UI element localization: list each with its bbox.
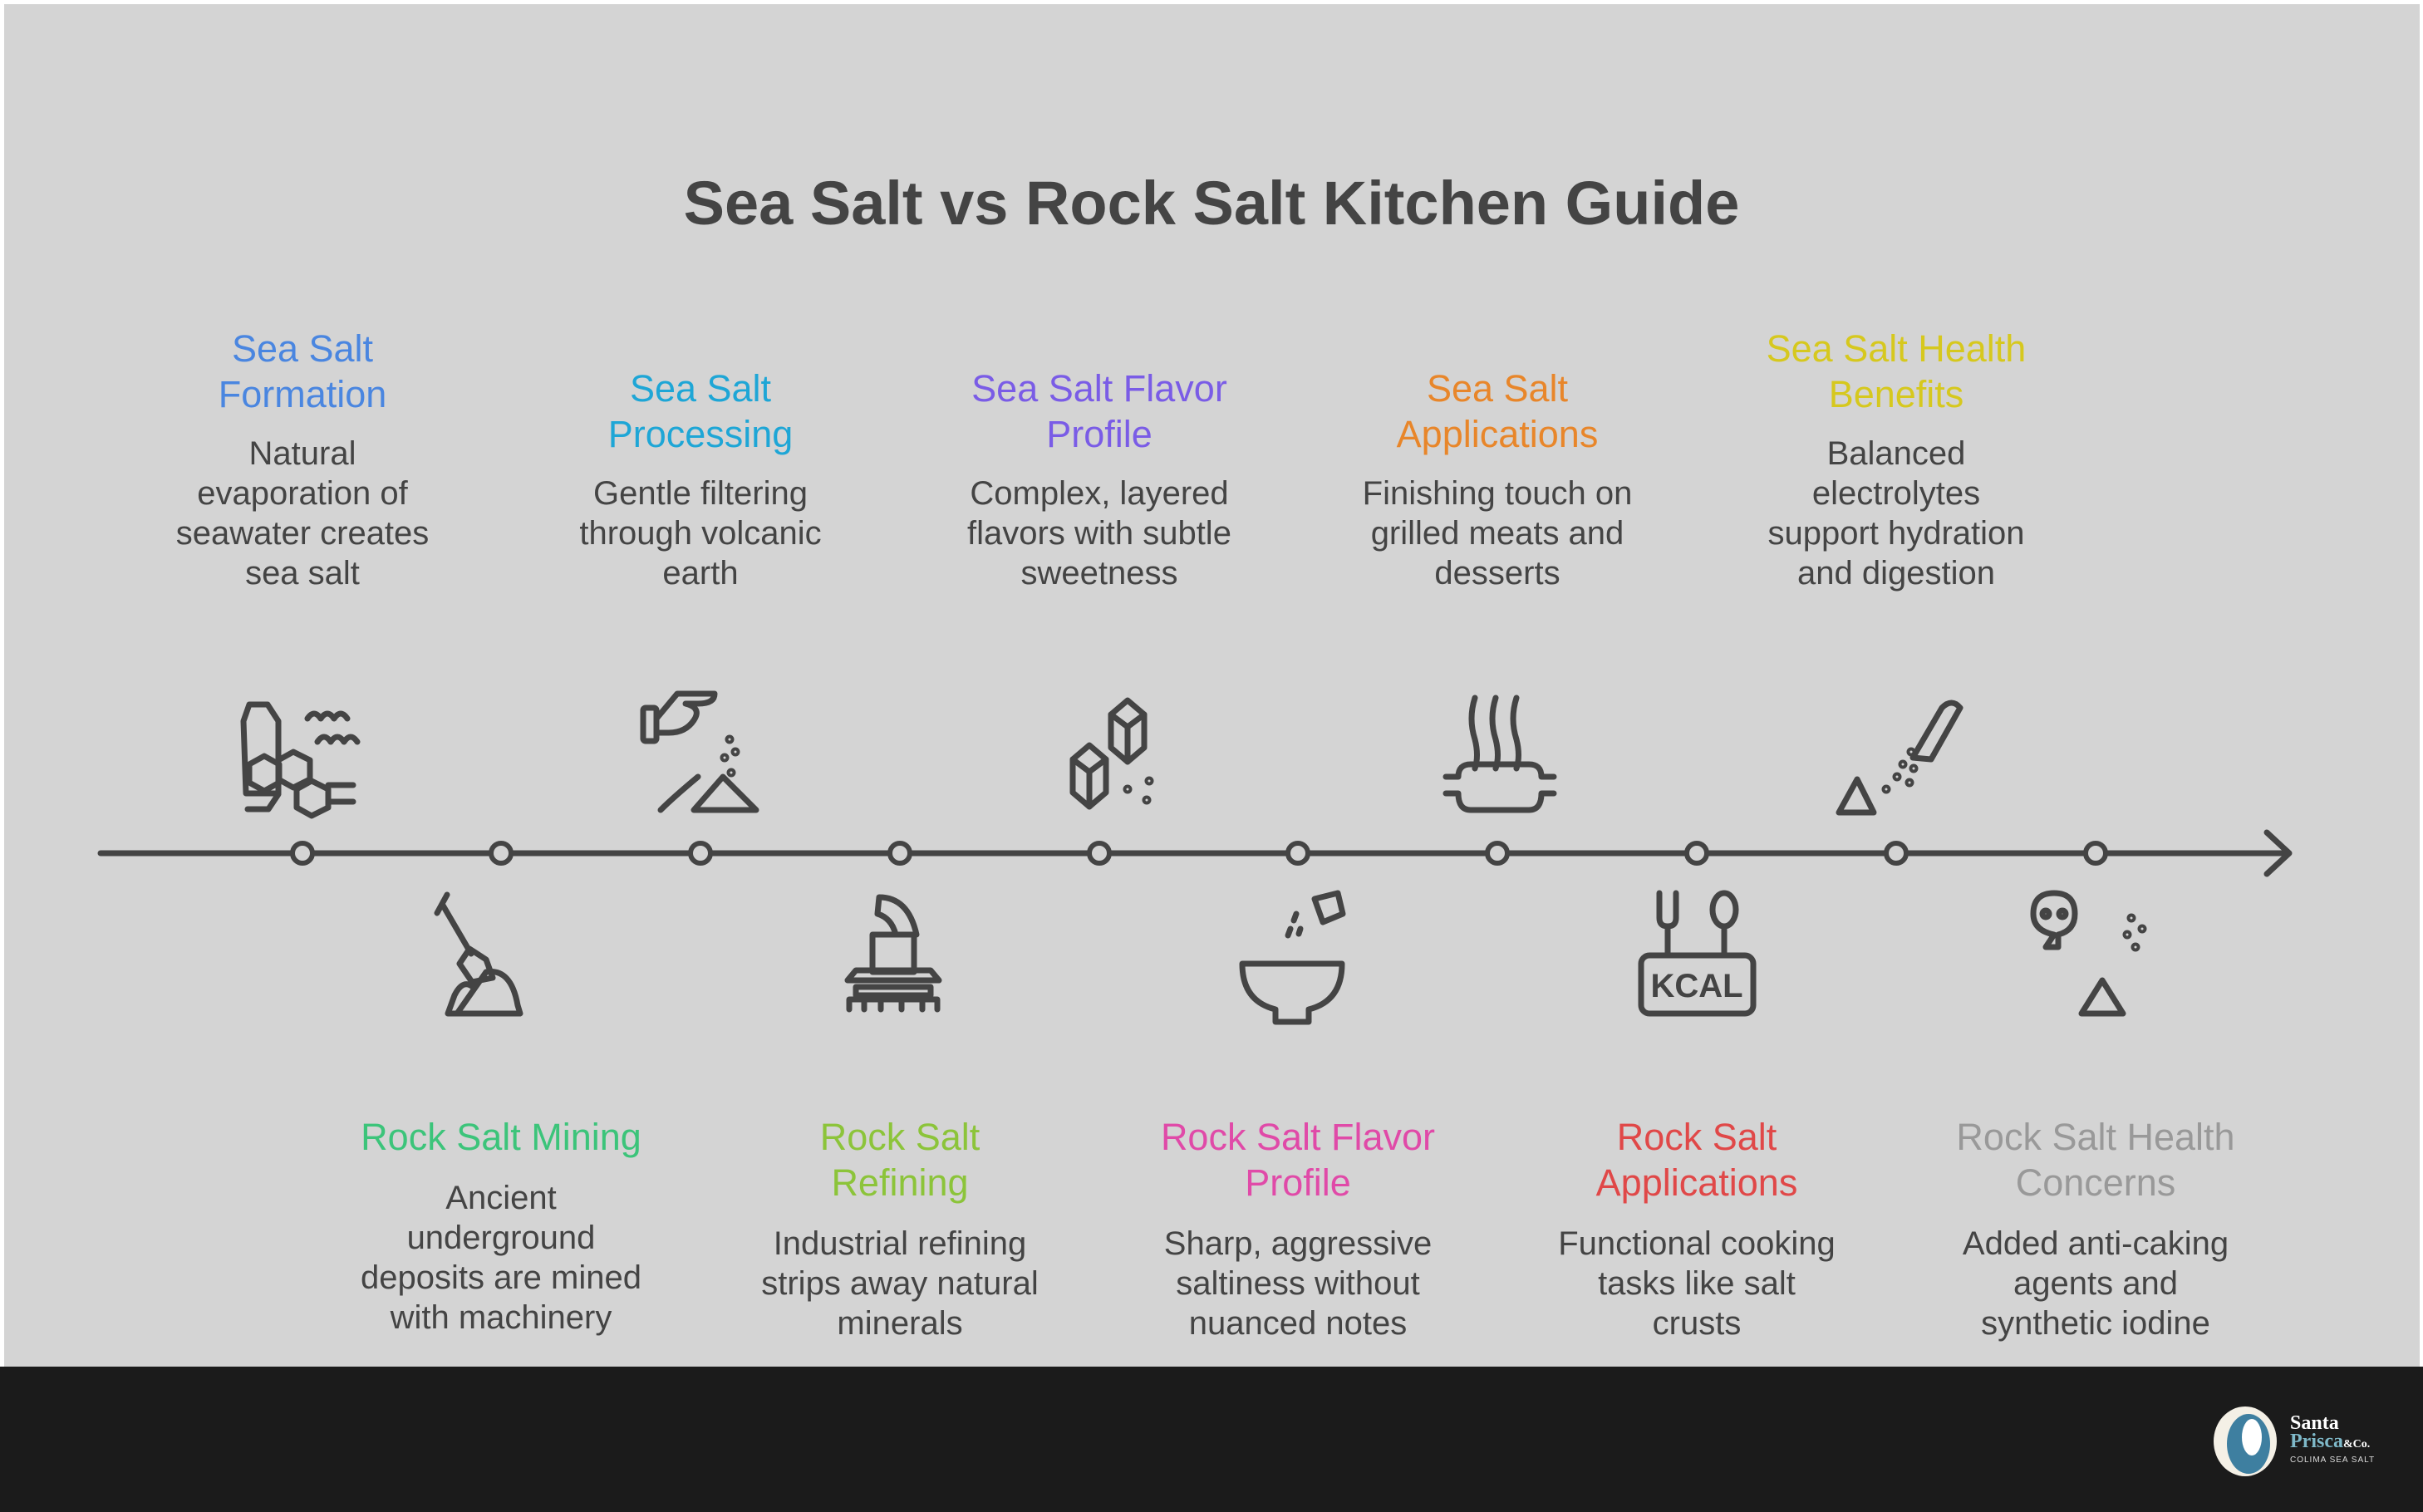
item: sea salt processing: Gentle filtering — [593, 475, 808, 512]
item: rock salt flavor: Profile — [1245, 1161, 1351, 1204]
item: sea salt health — [1767, 327, 2026, 592]
item: rock salt refining: Industrial refining — [774, 1225, 1026, 1262]
item: rock salt flavor — [1161, 1116, 1435, 1342]
item: rock salt mining: Rock Salt Mining — [361, 1116, 641, 1158]
item: rock salt mining — [361, 1116, 641, 1336]
item: rock salt mining: deposits are mined — [361, 1259, 641, 1296]
item: rock salt health — [1956, 1116, 2235, 1342]
icon: kcal fork and spoon — [1641, 893, 1753, 1014]
item: rock salt refining: minerals — [837, 1305, 963, 1342]
item: sea salt formation: Sea Salt — [232, 327, 373, 370]
item: rock salt applications: Applications — [1596, 1161, 1797, 1204]
item: rock salt refining — [761, 1116, 1039, 1342]
item: sea salt formation: sea salt — [245, 555, 360, 592]
item: sea salt processing: Processing — [608, 413, 793, 455]
item: rock salt health: Rock Salt Health — [1956, 1116, 2235, 1158]
item: sea salt applications: Sea Salt — [1427, 367, 1568, 410]
item: sea salt processing: earth — [662, 555, 739, 592]
item: sea salt flavor: sweetness — [1020, 555, 1177, 592]
item: rock salt mining: with machinery — [391, 1299, 612, 1336]
item: sea salt flavor: flavors with subtle — [967, 515, 1231, 552]
item: sea salt processing — [579, 367, 822, 592]
icon: steaming dish — [1446, 698, 1554, 810]
icon: sugar-like cubes — [1073, 700, 1151, 807]
icon: sea salt crystals and waves — [243, 704, 357, 816]
icon: skull and pile — [2033, 893, 2144, 1014]
item: sea salt applications: Applications — [1397, 413, 1598, 455]
item: rock salt flavor: nuanced notes — [1189, 1305, 1407, 1342]
item: sea salt health: support hydration — [1767, 515, 2025, 552]
logo: Prisca&Co. — [2290, 1431, 2370, 1452]
item: rock salt refining: Refining — [831, 1161, 969, 1204]
item: sea salt health: Sea Salt Health — [1767, 327, 2026, 370]
icon: rock salt mining shovel — [437, 895, 520, 1014]
item: sea salt applications: Finishing touch on — [1363, 475, 1632, 512]
item: sea salt flavor: Sea Salt Flavor — [971, 367, 1227, 410]
logo: Santa — [2290, 1412, 2339, 1434]
item: sea salt flavor: Complex, layered — [970, 475, 1229, 512]
icon: salt shaker over bowl — [1242, 893, 1343, 1022]
item: rock salt health: Concerns — [2016, 1161, 2175, 1204]
item: sea salt processing: through volcanic — [579, 515, 822, 552]
icon: refining machine — [848, 897, 939, 1009]
item: sea salt flavor: Profile — [1046, 413, 1153, 455]
logo — [2214, 1406, 2375, 1476]
item: rock salt health: agents and — [2013, 1265, 2178, 1302]
icon: hand sprinkling onto pile — [643, 694, 756, 810]
item: rock salt applications: Functional cooking — [1558, 1225, 1836, 1262]
item: rock salt refining: Rock Salt — [820, 1116, 980, 1158]
item: rock salt applications: tasks like salt — [1598, 1265, 1796, 1302]
item: rock salt flavor: Sharp, aggressive — [1164, 1225, 1432, 1262]
item: sea salt formation — [176, 327, 429, 592]
item: sea salt formation: Natural — [249, 435, 356, 472]
item: sea salt health: Balanced — [1827, 435, 1965, 472]
icon: salt shaker over pile — [1839, 703, 1960, 812]
item: rock salt applications — [1558, 1116, 1836, 1342]
item: rock salt mining: Ancient — [445, 1180, 557, 1216]
item: sea salt formation: evaporation of — [197, 475, 408, 512]
item: rock salt applications: crusts — [1653, 1305, 1741, 1342]
item: rock salt flavor: Rock Salt Flavor — [1161, 1116, 1435, 1158]
item: rock salt health: synthetic iodine — [1981, 1305, 2210, 1342]
item: sea salt applications: desserts — [1434, 555, 1560, 592]
item: sea salt health: and digestion — [1797, 555, 1995, 592]
timeline axis — [101, 832, 2289, 874]
logo: COLIMA SEA SALT — [2290, 1456, 2375, 1465]
item: sea salt applications — [1363, 367, 1632, 592]
timeline nodes — [292, 843, 2106, 863]
item: sea salt applications: grilled meats and — [1371, 515, 1624, 552]
item: sea salt formation: seawater creates — [176, 515, 429, 552]
icon: kcal fork and spoon: KCAL — [1650, 968, 1743, 1004]
item: rock salt health: Added anti-caking — [1963, 1225, 2229, 1262]
item: sea salt processing: Sea Salt — [630, 367, 771, 410]
item: sea salt flavor — [967, 367, 1231, 592]
item: rock salt flavor: saltiness without — [1176, 1265, 1420, 1302]
item: rock salt applications: Rock Salt — [1617, 1116, 1777, 1158]
title: Sea Salt vs Rock Salt Kitchen Guide — [684, 169, 1739, 238]
item: sea salt formation: Formation — [219, 373, 386, 415]
item: rock salt mining: underground — [407, 1220, 595, 1256]
item: rock salt refining: strips away natural — [761, 1265, 1039, 1302]
item: sea salt health: electrolytes — [1812, 475, 1980, 512]
item: sea salt health: Benefits — [1829, 373, 1963, 415]
